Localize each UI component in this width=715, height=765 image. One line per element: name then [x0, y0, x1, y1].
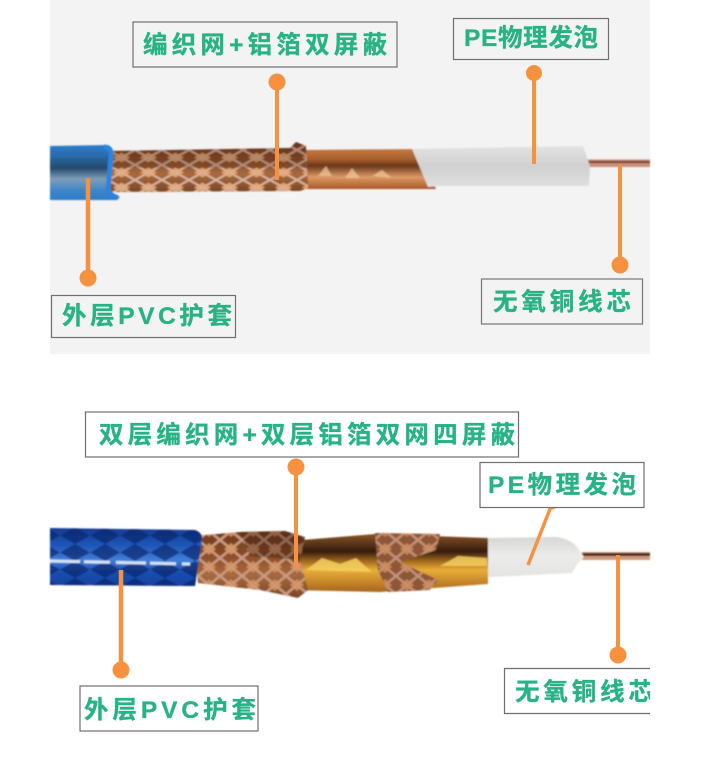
label: double braid plus double foil [86, 412, 518, 457]
label: oxygen-free copper core [482, 279, 642, 324]
copper wire core [586, 160, 650, 167]
inner braid [193, 531, 308, 598]
label: braid plus foil double shield: 编织网+铝箔双屏蔽 [143, 31, 388, 59]
copper foil layer [300, 149, 436, 189]
label: braid plus foil double shield [133, 22, 397, 67]
white foam insulation [412, 146, 590, 187]
label: outer PVC sheath: 外层PVC护套 [62, 302, 232, 330]
leader: PVC jacket 2 [112, 570, 130, 678]
leader: braid + foil [268, 74, 286, 180]
label: oxygen-free copper core 2 [504, 668, 653, 714]
label: PE physical foaming: PE物理发泡 [464, 24, 598, 52]
leader: PE foam 2 [528, 498, 558, 565]
label: oxygen-free copper core 2: 无氧铜线芯 [515, 678, 653, 706]
label: PE physical foaming 2 [480, 462, 644, 508]
blue braided PVC jacket [50, 528, 202, 586]
panel: top cable background [50, 0, 650, 354]
outer braid patch [375, 533, 440, 592]
braided shield [108, 142, 308, 192]
photo: bottom cable cross-section [50, 528, 650, 598]
gold foil layer [290, 534, 488, 592]
leader: copper core 2 [610, 555, 626, 664]
white foam insulation [486, 537, 584, 577]
leader: PVC jacket [80, 178, 96, 286]
label: outer PVC sheath 2: 外层PVC护套 [84, 696, 256, 724]
leader: PE foam [526, 65, 542, 164]
label: PE physical foaming [454, 18, 608, 60]
copper wire core [582, 552, 650, 560]
label: oxygen-free copper core: 无氧铜线芯 [493, 288, 631, 316]
leader: copper core [612, 165, 628, 274]
label: PE physical foaming 2: PE物理发泡 [488, 471, 636, 499]
photo: top cable cross-section [50, 142, 650, 200]
label: outer PVC sheath [52, 296, 236, 338]
label: outer PVC sheath 2 [80, 686, 258, 731]
leader: double braid + foil [288, 458, 304, 568]
label: double braid plus double foil: 双层编织网+双层铝箔双网四屏蔽 [99, 421, 516, 449]
blue PVC jacket [50, 145, 120, 200]
